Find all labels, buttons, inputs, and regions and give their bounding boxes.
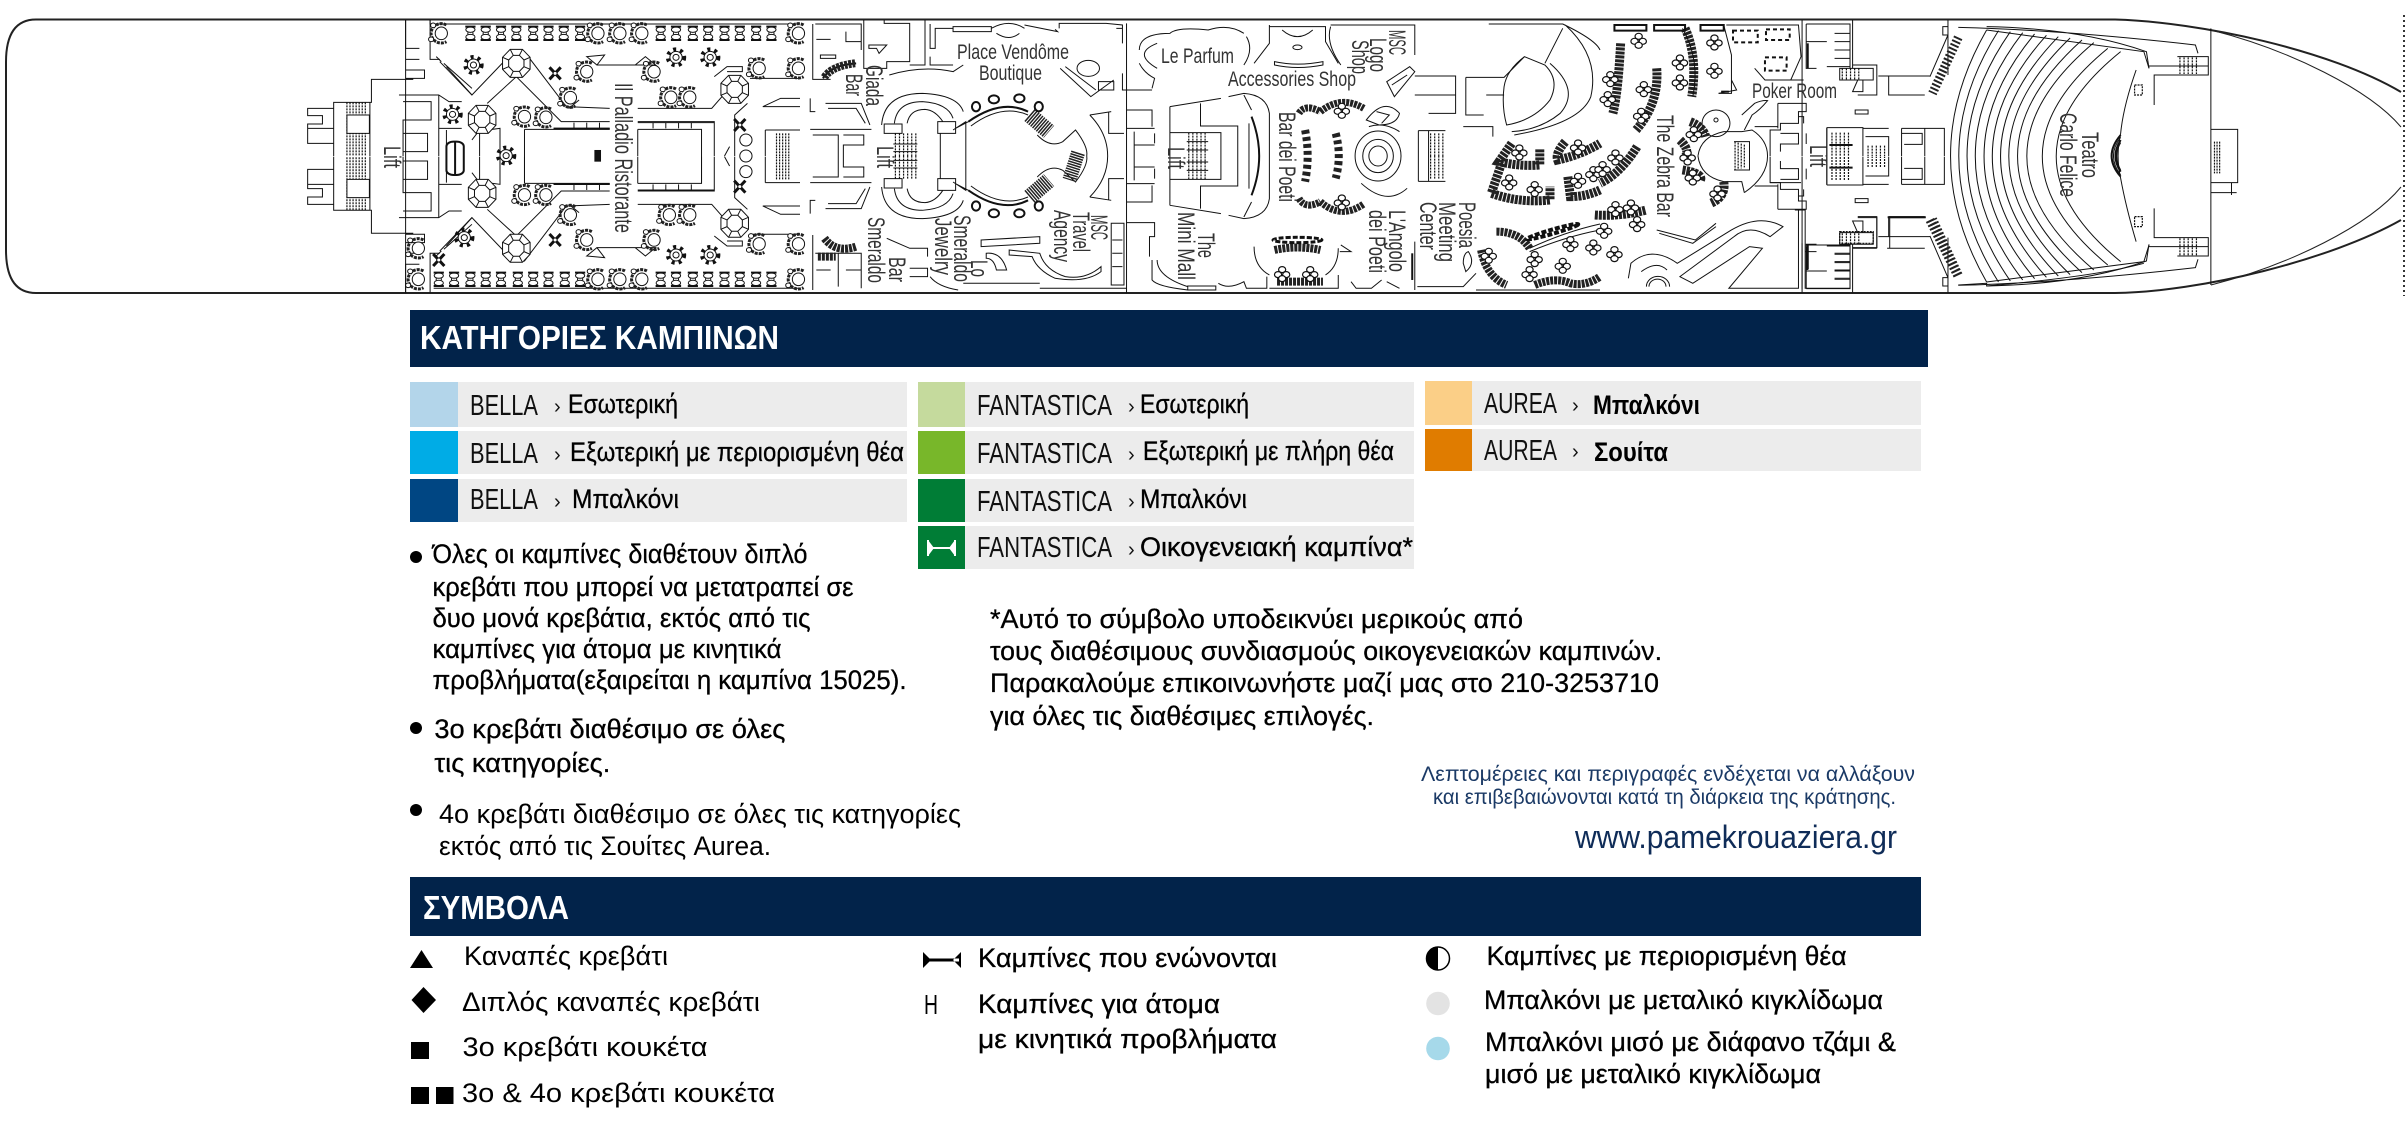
deck plan venue labels: Bar dei Poeti	[1273, 112, 1300, 202]
panel: Aurea categories: ›	[1572, 441, 1579, 463]
symbols legend: view and balconies: Μπαλκόνι με μεταλικό κιγκλίδωμα	[1484, 985, 1883, 1015]
text block: bed notes: καμπίνες για άτομα με κινητικά	[432, 634, 782, 664]
text block: family cabin footnote	[990, 604, 1662, 731]
panel: Fantastica categories: Εσωτερική	[1140, 389, 1249, 419]
deck plan venue labels: MSC	[1085, 215, 1112, 240]
deck plan venue labels: Lift	[378, 146, 405, 168]
panel: Bella categories: Εξωτερική με περιορισμένη θέα	[570, 437, 904, 467]
symbols legend: view and balconies	[1426, 941, 1896, 1089]
hull outline	[6, 15, 2404, 296]
panel: Aurea categories: ›	[1572, 395, 1579, 417]
deck plan venue labels: Place Vendôme	[957, 41, 1069, 64]
symbols legend: connecting and accessible	[923, 943, 1277, 1054]
panel: Bella categories: ›	[554, 396, 561, 418]
deck plan venue labels: Teatro	[2076, 132, 2103, 178]
panel: Fantastica categories: ›	[1128, 491, 1135, 513]
panel: Fantastica categories: ›	[1128, 444, 1135, 466]
deck plan venue labels: Lift	[871, 146, 898, 168]
panel: Fantastica categories: FANTASTICA	[977, 390, 1112, 422]
deck plan venue labels: Travel	[1067, 212, 1094, 252]
panel: Fantastica categories: Οικογενειακή καμπίνα*	[1140, 532, 1413, 562]
text block: disclaimer: και επιβεβαιώνονται κατά τη διάρκεια της κράτησης.	[1433, 786, 1896, 809]
panel: Fantastica categories	[918, 382, 1414, 569]
deck plan venue labels: Carlo Felice	[2054, 113, 2081, 197]
deck plan venue labels: Boutique	[979, 62, 1042, 85]
deck plan venue labels: Bar	[883, 257, 910, 282]
panel: Bella categories: BELLA	[470, 390, 538, 422]
symbols legend: beds: Καναπές κρεβάτι	[464, 941, 668, 971]
text block: bed notes: Όλες οι καμπίνες διαθέτουν διπλό	[432, 539, 808, 569]
deck plan venue labels	[378, 30, 2103, 283]
deck plan venue labels: Poker Room	[1752, 80, 1837, 103]
deck plan venue labels: dei Poeti	[1363, 210, 1390, 273]
deck plan venue labels: Smeraldo	[948, 215, 975, 282]
panel: Aurea categories: Σουίτα	[1594, 437, 1668, 467]
icon: square	[411, 1042, 429, 1059]
panel: Aurea categories: AUREA	[1484, 388, 1557, 420]
symbols legend: view and balconies: μισό με μεταλικό κιγκλίδωμα	[1485, 1059, 1821, 1089]
panel: Aurea categories	[1425, 381, 1921, 471]
deck plan venue labels: Lift	[1804, 145, 1831, 167]
deck plan venue labels: Le Parfum	[1161, 45, 1234, 68]
panel: Aurea categories: AUREA	[1484, 435, 1557, 467]
text block: family cabin footnote: Παρακαλούμε επικοινωνήστε μαζί μας στο 210-3253710	[990, 668, 1659, 698]
panel: Bella categories: ›	[554, 444, 561, 466]
panel: Bella categories: Μπαλκόνι	[572, 484, 679, 514]
deck plan venue labels: Accessories Shop	[1228, 68, 1356, 91]
panel: Fantastica categories: ›	[1128, 396, 1135, 418]
deck plan venue labels: Jewelry	[929, 218, 956, 275]
text block: disclaimer: Λεπτομέρειες και περιγραφές ενδέχεται να αλλάξουν	[1421, 763, 1915, 786]
ship deck plan	[6, 15, 2404, 296]
icon: half circle	[1426, 947, 1450, 970]
text block: disclaimer	[1421, 763, 1915, 809]
deck plan venue labels: Giada	[860, 65, 887, 106]
heading: cabin categories	[410, 310, 1928, 367]
deck plan venue labels: Lo	[965, 260, 992, 277]
text block: bed notes: κρεβάτι που μπορεί να μετατραπεί σε	[432, 572, 854, 602]
panel: Fantastica categories: FANTASTICA	[977, 438, 1112, 470]
panel: Aurea categories: Μπαλκόνι	[1593, 390, 1700, 420]
panel: Fantastica categories: Εξωτερική με πλήρη θέα	[1143, 436, 1394, 466]
deck plan venue labels: Meeting	[1433, 202, 1460, 262]
deck plan venue labels: L'Angolo	[1383, 210, 1410, 272]
deck plan venue labels: The Zebra Bar	[1651, 115, 1678, 217]
icon: connecting cabins	[923, 952, 961, 968]
text block: bed notes: δυο μονά κρεβάτια, εκτός από τις	[432, 603, 810, 633]
symbols legend: view and balconies: Μπαλκόνι μισό με διάφανο τζάμι &	[1485, 1027, 1896, 1057]
symbols legend: beds: 3ο & 4ο κρεβάτι κουκέτα	[462, 1078, 775, 1108]
forward section: Zebra Bar and Teatro Carlo Felice	[1595, 20, 2238, 293]
text block: bed notes: εκτός από τις Σουίτες Aurea.	[439, 831, 771, 861]
deck plan venue labels: Mini Mall	[1172, 212, 1199, 280]
symbols legend: view and balconies: Καμπίνες με περιορισμένη θέα	[1487, 941, 1847, 971]
deck plan venue labels: Poesia	[1453, 202, 1480, 248]
icon: two squares	[411, 1087, 454, 1104]
symbols legend: beds: 3ο κρεβάτι κουκέτα	[462, 1032, 708, 1062]
deck plan venue labels: The	[1192, 233, 1219, 258]
deck plan venue labels: Shop	[1346, 40, 1373, 74]
panel: Bella categories: ›	[554, 491, 561, 513]
panel: Bella categories	[410, 382, 907, 522]
icon: blue circle	[1426, 1037, 1450, 1060]
aft section: Il Palladio Ristorante	[308, 20, 805, 293]
text block: bed notes: 3ο κρεβάτι διαθέσιμο σε όλες	[434, 714, 785, 744]
icon: diamond	[412, 987, 436, 1013]
symbols legend: beds: Διπλός καναπές κρεβάτι	[462, 987, 760, 1017]
panel: Bella categories: BELLA	[470, 438, 538, 470]
icon: grey circle	[1426, 992, 1450, 1015]
text block: bed notes: τις κατηγορίες.	[434, 748, 610, 778]
panel: Fantastica categories: FANTASTICA	[977, 486, 1112, 518]
text block: bed notes: 4ο κρεβάτι διαθέσιμο σε όλες τις κατηγορίες	[439, 799, 961, 829]
symbols legend: connecting and accessible: με κινητικά προβλήματα	[978, 1024, 1277, 1054]
text block: bed notes	[410, 539, 961, 861]
symbols legend: connecting and accessible: Καμπίνες που ενώνονται	[978, 943, 1277, 973]
deck plan venue labels: MSC	[1383, 30, 1410, 55]
heading: symbols: ΣΥΜΒΟΛΑ	[423, 889, 569, 926]
midship section: atrium, shops and bars	[810, 20, 1601, 293]
deck plan venue labels: Logo	[1364, 38, 1391, 72]
icon: H accessible: H	[924, 989, 938, 1020]
website address: www.pamekrouaziera.gr	[1574, 819, 1897, 855]
deck plan venue labels: Center	[1414, 202, 1441, 250]
deck plan venue labels: Smeraldo	[862, 217, 889, 283]
heading: cabin categories: ΚΑΤΗΓΟΡΙΕΣ ΚΑΜΠΙΝΩΝ	[420, 319, 779, 356]
text block: family cabin footnote: *Αυτό το σύμβολο υποδεικνύει μερικούς από	[990, 604, 1523, 634]
panel: Bella categories: BELLA	[470, 484, 538, 516]
text block: family cabin footnote: για όλες τις διαθέσιμες επιλογές.	[990, 701, 1374, 731]
deck plan venue labels: Lift	[1162, 147, 1189, 169]
panel: Fantastica categories: Μπαλκόνι	[1140, 484, 1247, 514]
symbols legend: beds	[410, 941, 775, 1108]
panel: Fantastica categories: FANTASTICA	[977, 532, 1112, 564]
symbols legend: connecting and accessible: Καμπίνες για άτομα	[978, 989, 1220, 1019]
deck plan venue labels: Il Palladio Ristorante	[609, 83, 637, 233]
text block: family cabin footnote: τους διαθέσιμους συνδιασμούς οικογενειακών καμπινών.	[990, 636, 1662, 666]
panel: Bella categories: Εσωτερική	[568, 389, 678, 419]
heading: symbols	[410, 877, 1921, 936]
deck plan venue labels: Agency	[1048, 210, 1075, 262]
panel: Fantastica categories: ›	[1128, 539, 1135, 561]
deck plan venue labels: Bar	[840, 74, 867, 96]
text block: bed notes: προβλήματα(εξαιρείται η καμπίνα 15025).	[432, 665, 906, 695]
icon: triangle	[410, 950, 433, 968]
